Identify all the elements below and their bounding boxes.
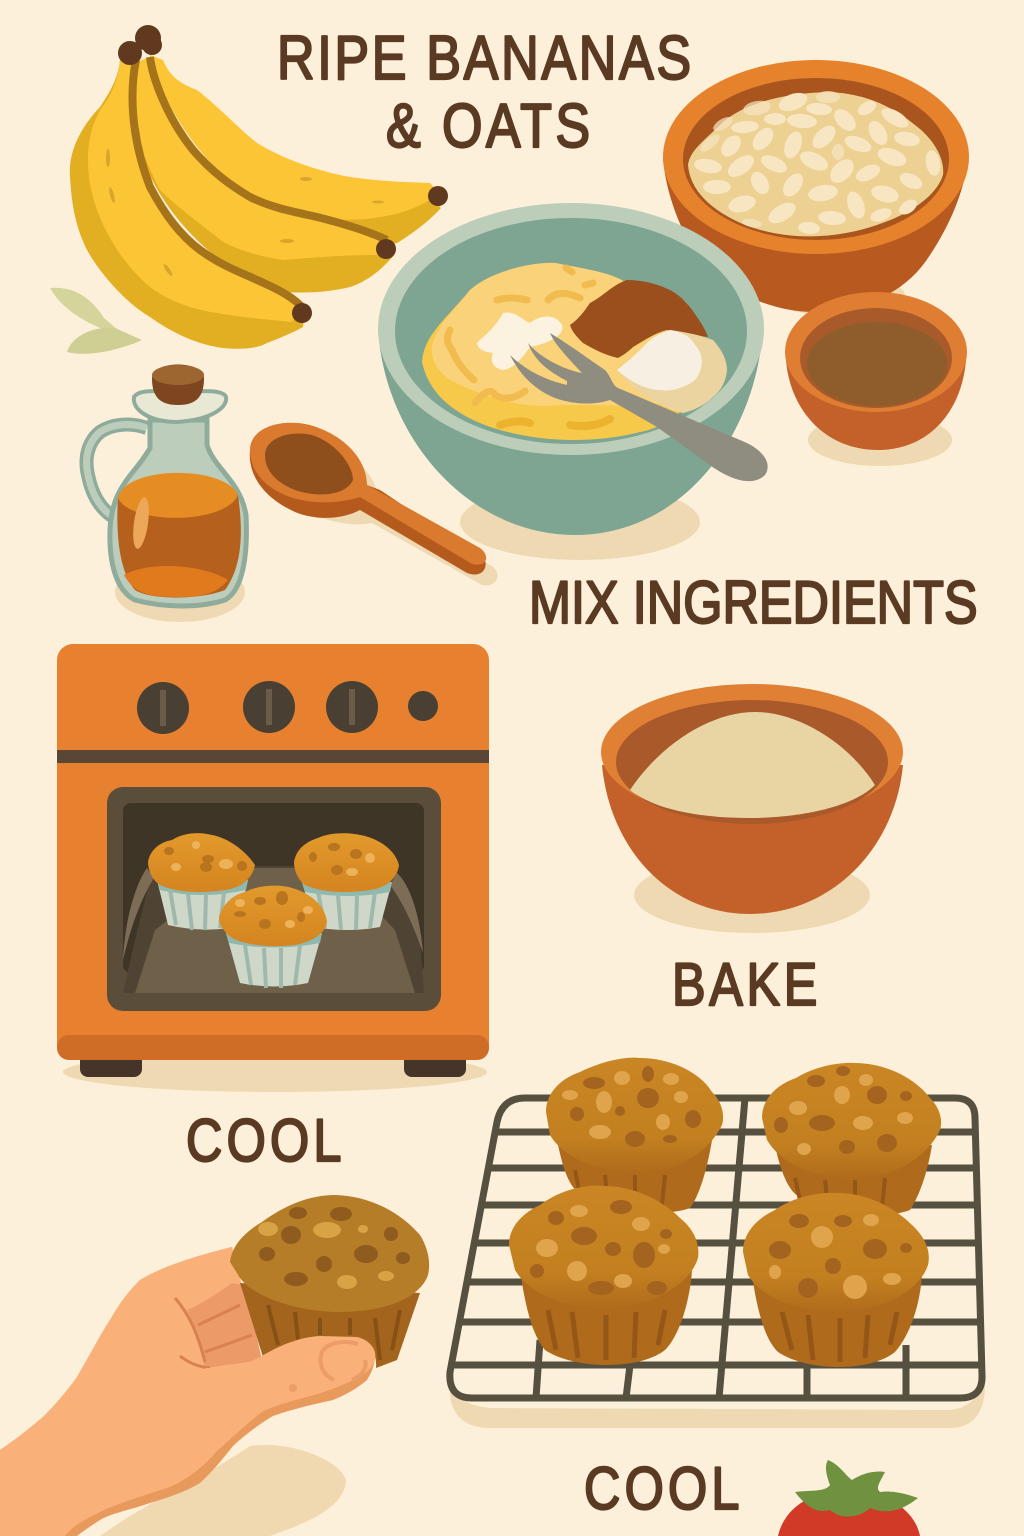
fingers behind muffin xyxy=(175,1283,262,1368)
icon: syrup bottle xyxy=(86,364,246,622)
muffin: rack back right xyxy=(762,1063,941,1214)
icon: oats bowl xyxy=(663,60,969,315)
title: RIPE BANANAS xyxy=(277,24,691,93)
flour mound xyxy=(617,330,727,413)
batter xyxy=(422,263,700,440)
icon: oven xyxy=(57,644,489,1092)
icon: flour bowl xyxy=(601,684,903,933)
icon: banana bunch xyxy=(70,25,448,349)
banana stem xyxy=(118,25,162,65)
muffin: rack front left xyxy=(509,1186,698,1365)
icon: hand holding muffin xyxy=(0,1195,429,1536)
title: & OATS xyxy=(386,92,590,161)
title xyxy=(277,24,691,161)
cork xyxy=(152,364,204,405)
baking tray xyxy=(123,866,424,993)
syrup xyxy=(117,473,241,598)
muffin in oven left xyxy=(148,833,255,930)
oven knobs xyxy=(137,681,438,734)
icon: leaves xyxy=(50,288,142,354)
muffin: rack back left xyxy=(546,1058,723,1212)
oven window xyxy=(107,787,441,1011)
muffin in oven right xyxy=(294,833,399,930)
icon: mixing bowl xyxy=(378,203,768,560)
white flour dab xyxy=(477,312,562,370)
muffin in hand xyxy=(230,1195,429,1368)
icon: cooling rack xyxy=(450,1098,985,1428)
icon: spice bowl xyxy=(785,292,967,466)
brown sugar xyxy=(570,280,708,358)
heading: mix ingredients: MIX INGREDIENTS xyxy=(529,569,978,636)
icon: strawberry xyxy=(778,1460,920,1536)
muffin: rack front right xyxy=(743,1193,929,1367)
fork xyxy=(510,333,768,481)
heading: cool: COOL xyxy=(186,1107,341,1174)
banana: back xyxy=(150,55,448,245)
thumb xyxy=(205,1336,375,1398)
muffin in oven front xyxy=(219,886,327,988)
heading: bake: BAKE xyxy=(672,951,817,1018)
bottle handle xyxy=(86,425,147,516)
oat flakes xyxy=(693,89,942,235)
heading: cool second: COOL xyxy=(584,1455,739,1522)
bottle lip xyxy=(134,391,226,422)
banana: middle xyxy=(133,57,396,292)
hand shadow xyxy=(100,1445,346,1536)
banana: front xyxy=(70,60,312,349)
icon: wooden spoon xyxy=(250,423,497,585)
bottle glass xyxy=(110,420,246,606)
hand xyxy=(0,1247,375,1536)
